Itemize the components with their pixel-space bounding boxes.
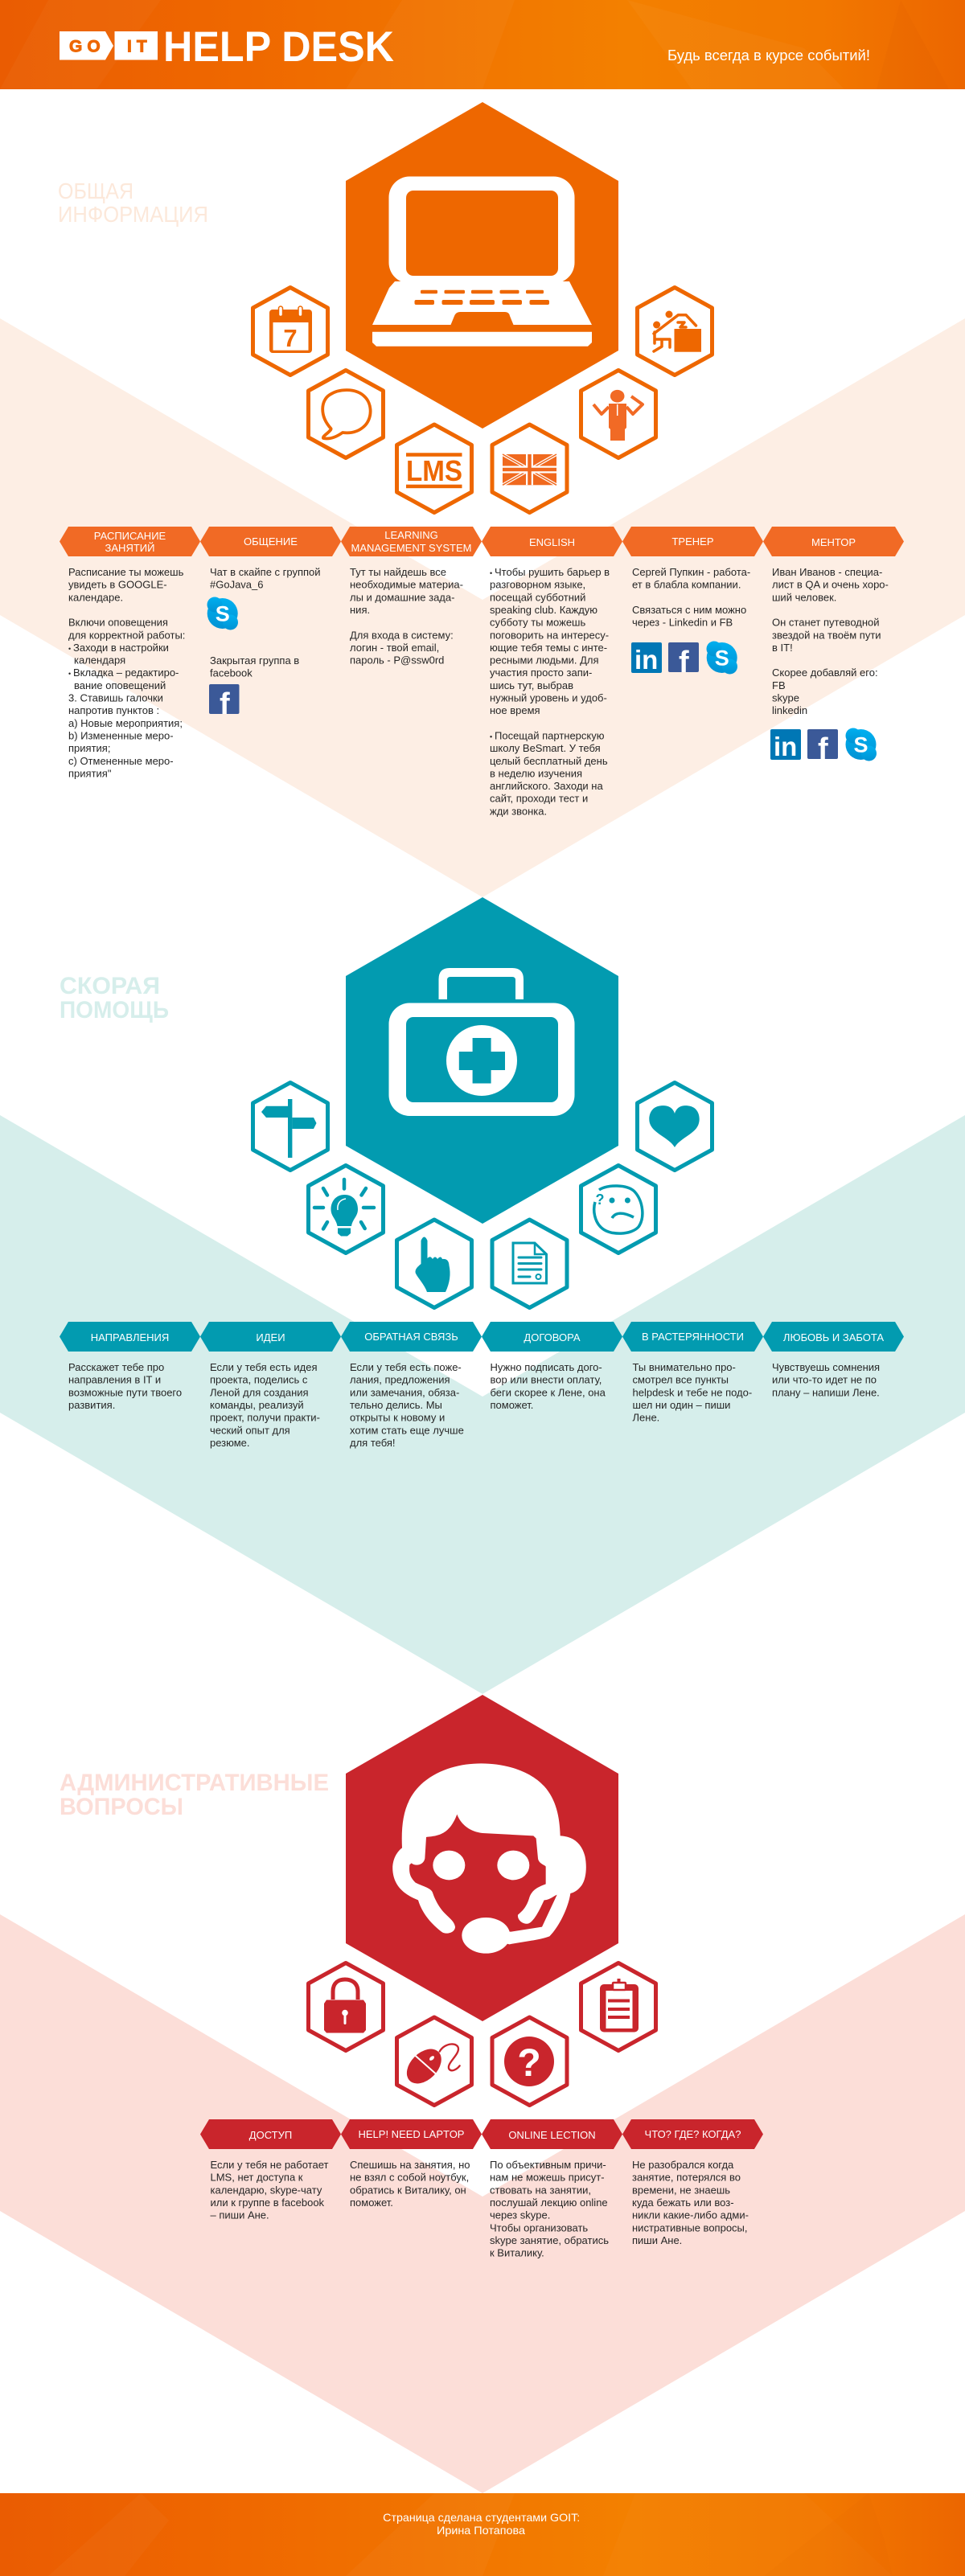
text column: online lection: По объективным причи-: [490, 2159, 606, 2171]
section heading: admin questions: [60, 1770, 329, 1820]
text column: schedule: для корректной работы:: [68, 629, 185, 641]
text column: ideas: проект, получи практи-: [210, 1412, 320, 1424]
text column: schedule: календаре.: [68, 591, 123, 603]
text column: laptop: Спешишь на занятия, но: [350, 2159, 470, 2171]
footer credit: Страница сделана студентами GOIT:: [383, 2511, 580, 2524]
text column: laptop: обратись к Виталику, он: [350, 2184, 466, 2196]
hex icon: LMS: [397, 425, 471, 513]
background chevron: admin questions: [0, 1914, 965, 2493]
text column: English: ющие тебя темы с инте-: [490, 642, 607, 654]
text column: English: Посещай партнерскую: [495, 729, 605, 741]
social icons: mentor: in: [774, 732, 797, 761]
text column: schedule: приятия;: [68, 742, 110, 754]
hex icon: lock: [309, 1963, 383, 2050]
text column: what where when: никли какие-либо адми-: [632, 2209, 749, 2221]
hex icon: question mark: [492, 2017, 567, 2105]
social icons: trainer: [631, 642, 737, 679]
text column: what where when: занятие, потерялся во: [632, 2172, 741, 2184]
text column: mentor: FB: [772, 679, 786, 691]
text column: mentor: Он станет путеводной: [772, 617, 880, 629]
ribbon row: first aid: ДОГОВОРА: [524, 1331, 581, 1343]
text column: LMS: ния.: [350, 604, 370, 616]
text column: English: Чтобы рушить барьер в: [495, 566, 610, 578]
text column: schedule: вание оповещений: [74, 679, 166, 691]
text column: ideas: команды, реализуй: [210, 1399, 304, 1411]
ribbon row: general information: ЗАНЯТИЙ: [105, 542, 154, 554]
text column: communication: facebook: [210, 667, 253, 679]
ribbon row: general information: MANAGEMENT SYSTEM: [351, 542, 472, 554]
ribbon row: first aid: ОБРАТНАЯ СВЯЗЬ: [364, 1331, 458, 1343]
text column: what where when: Не разобрался когда: [632, 2159, 734, 2171]
text column: English: английского. Заходи на: [490, 780, 603, 792]
section heading: admin questions: ВОПРОСЫ: [60, 1794, 183, 1820]
text column: LMS: пароль - P@ssw0rd: [350, 654, 444, 667]
ribbon row: general information: [60, 527, 904, 556]
text column: English: участия просто запи-: [490, 667, 592, 679]
text column: schedule: •: [68, 670, 71, 678]
text column: English: разговорном языке,: [490, 579, 585, 591]
footer banner: [0, 2493, 965, 2576]
logo: GO IT: [60, 31, 158, 59]
text column: access: Если у тебя не работает: [211, 2159, 329, 2171]
text column: online lection: через skype.: [490, 2209, 550, 2221]
text column: schedule: календаря: [74, 654, 125, 667]
icon: support agent with headset: [392, 1763, 586, 1954]
text column: feedback: для тебя!: [350, 1437, 396, 1449]
text column: confused: Лене.: [632, 1412, 659, 1424]
text column: laptop: не взял с собой ноутбук,: [350, 2172, 469, 2184]
text column: English: ное время: [490, 704, 540, 716]
hex icon: pointing hand: [397, 1220, 471, 1307]
ribbon row: first aid: [60, 1322, 904, 1352]
text column: contract: Нужно подписать дого-: [491, 1361, 602, 1373]
text column: English: нужный уровень и удоб-: [490, 691, 607, 704]
social icons: trainer: in: [634, 645, 658, 675]
background chevron: general information: [0, 318, 965, 897]
text column: online lection: нам не можешь присут-: [490, 2172, 605, 2184]
hex icon: trainer: [581, 370, 656, 458]
text column: what where when: нистративные вопросы,: [632, 2221, 748, 2233]
hex icon: calendar: [253, 288, 328, 375]
logo: GO IT: IT: [127, 37, 152, 56]
hex icon: chat bubble: [309, 370, 383, 458]
text column: ideas: Леной для создания: [210, 1386, 309, 1398]
text column: English: •: [490, 569, 492, 577]
text column: mentor: в IT!: [772, 642, 793, 654]
text column: access: – пиши Ане.: [211, 2209, 269, 2221]
section heading: first aid: ПОМОЩЬ: [60, 997, 169, 1023]
icon: laptop: [372, 177, 592, 347]
text column: online lection: к Виталику.: [490, 2247, 544, 2259]
text column: feedback: хотим стать еще лучше: [350, 1424, 464, 1436]
text column: English: ресными людьми. Для: [490, 654, 599, 667]
text column: schedule: увидеть в GOOGLE-: [68, 579, 167, 591]
hex icon: clipboard: [581, 1963, 656, 2050]
text column: directions: возможные пути твоего: [68, 1386, 182, 1398]
ribbon row: general information: ENGLISH: [529, 536, 575, 548]
main hexagon: laptop: [346, 102, 618, 429]
text column: what where when: времени, не знаешь: [632, 2184, 730, 2196]
section heading: general information: [58, 178, 208, 227]
text column: online lection: послушай лекцию online: [490, 2197, 608, 2209]
main hexagon: first aid kit: [346, 897, 618, 1224]
hex icon: confused face: [581, 1166, 656, 1253]
text column: trainer: Сергей Пупкин - работа-: [632, 566, 750, 578]
hex icon: confused face: ?: [595, 1192, 605, 1208]
tagline: Будь всегда в курсе событий!: [667, 47, 870, 64]
ribbon row: general information: ОБЩЕНИЕ: [244, 535, 298, 548]
section heading: first aid: СКОРАЯ: [60, 973, 160, 999]
text column: confused: Ты внимательно про-: [632, 1361, 736, 1373]
logo: GO IT: GO: [69, 37, 105, 56]
hex icon: document: [492, 1220, 567, 1307]
text column: access: LMS, нет доступа к: [211, 2172, 303, 2184]
text column: online lection: ствовать на занятии,: [490, 2184, 591, 2196]
text column: confused: helpdesk и тебе не подо-: [632, 1386, 752, 1398]
ribbon row: first aid: ИДЕИ: [256, 1331, 285, 1343]
ribbon row: first aid: НАПРАВЛЕНИЯ: [91, 1331, 169, 1343]
ribbon row: admin questions: ЧТО? ГДЕ? КОГДА?: [645, 2128, 741, 2140]
text column: LMS: лы и домашние зада-: [350, 591, 454, 603]
text column: English: в неделю изучения: [490, 767, 582, 779]
text column: contract: вор или внести оплату,: [491, 1374, 602, 1386]
text column: online lection: Чтобы организовать: [490, 2221, 588, 2233]
text column: laptop: поможет.: [350, 2197, 393, 2209]
icon: skype: S: [216, 601, 230, 626]
text column: communication: Чат в скайпе с группой: [210, 566, 321, 578]
text column: mentor: лист в QA и очень хоро-: [772, 579, 889, 591]
hex icon: calendar: 7: [283, 324, 298, 352]
text column: directions: Расскажет тебе про: [68, 1361, 164, 1373]
section heading: general information: ОБЩАЯ: [58, 178, 133, 203]
text column: ideas: резюме.: [210, 1437, 250, 1449]
icon: first aid kit: [389, 968, 574, 1116]
ribbon row: general information: МЕНТОР: [811, 536, 856, 548]
hex icon: mentor helping climber: [637, 288, 712, 375]
text column: schedule: Включи оповещения: [68, 617, 168, 629]
hex icon: LMS: LMS: [406, 454, 462, 487]
text column: English: посещай субботний: [490, 591, 585, 603]
text column: mentor: Скорее добавляй его:: [772, 667, 878, 679]
text column: access: или к группе в facebook: [211, 2197, 325, 2209]
background chevron: first aid: [0, 1115, 965, 1694]
text column: mentor: звездой на твоём пути: [772, 629, 881, 641]
text column: mentor: skype: [772, 691, 799, 704]
text column: schedule: Расписание ты можешь: [68, 566, 184, 578]
text column: English: speaking club. Каждую: [490, 604, 597, 616]
hex icon: light bulb: [309, 1166, 383, 1253]
text column: confused: шел ни один – пиши: [632, 1399, 730, 1411]
text column: schedule: c) Отмененные меро-: [68, 755, 174, 767]
text column: love and care: Чувствуешь сомнения: [772, 1361, 880, 1373]
ribbon row: admin questions: HELP! NEED LAPTOP: [359, 2128, 464, 2140]
text column: English: •: [490, 732, 492, 740]
text column: mentor: linkedin: [772, 704, 807, 716]
hex icon: signpost: [253, 1082, 328, 1171]
social icons: mentor: [770, 728, 877, 766]
ribbon row: first aid: В РАСТЕРЯННОСТИ: [642, 1331, 744, 1343]
text column: feedback: тельно делись. Мы: [350, 1399, 442, 1411]
social icons: trainer: f: [679, 646, 689, 679]
social icons: mentor: f: [818, 732, 828, 766]
text column: schedule: a) Новые мероприятия;: [68, 717, 183, 729]
footer credit: Ирина Потапова: [437, 2524, 525, 2537]
text column: what where when: пиши Ане.: [632, 2234, 682, 2246]
ribbon row: admin questions: ONLINE LECTION: [508, 2129, 596, 2141]
text column: ideas: Если у тебя есть идея: [210, 1361, 317, 1373]
text column: love and care: или что-то идет не по: [772, 1374, 877, 1386]
text column: English: школу BeSmart. У тебя: [490, 742, 601, 754]
text column: feedback: лания, предложения: [350, 1374, 450, 1386]
main hexagon: support agent: [346, 1695, 618, 2021]
text column: what where when: куда бежать или воз-: [632, 2197, 734, 2209]
ribbon row: general information: РАСПИСАНИЕ: [94, 530, 166, 542]
social icons: mentor: S: [853, 733, 868, 757]
ribbon row: admin questions: [200, 2119, 763, 2149]
text column: ideas: проекта, поделись с: [210, 1374, 308, 1386]
icon: facebook: f: [220, 687, 230, 721]
text column: love and care: плану – напиши Лене.: [772, 1386, 880, 1398]
text column: trainer: ет в блабла компании.: [632, 579, 741, 591]
text column: LMS: логин - твой email,: [350, 642, 439, 654]
text column: feedback: открыты к новому и: [350, 1412, 445, 1424]
text column: English: жди звонка.: [490, 805, 547, 817]
text column: contract: поможет.: [491, 1399, 533, 1411]
text column: schedule: b) Измененные меро-: [68, 729, 174, 741]
text column: feedback: Если у тебя есть поже-: [350, 1361, 462, 1373]
ribbon row: general information: LEARNING: [384, 529, 438, 541]
hex icon: computer mouse: [397, 2017, 471, 2105]
text column: trainer: через - Linkedin и FB: [632, 617, 733, 629]
ribbon row: admin questions: ДОСТУП: [249, 2129, 292, 2141]
social icons: trainer: S: [715, 646, 729, 671]
text column: schedule: напротив пунктов :: [68, 704, 159, 716]
text column: contract: беги скорее к Лене, она: [491, 1386, 606, 1398]
section heading: first aid: [60, 973, 169, 1023]
hex icon: question mark: ?: [517, 2042, 541, 2085]
text column: LMS: необходимые материа-: [350, 579, 463, 591]
ribbon row: general information: ТРЕНЕР: [671, 535, 714, 548]
text column: feedback: или замечания, обяза-: [350, 1386, 459, 1398]
text column: schedule: Вкладка – редактиро-: [73, 667, 179, 679]
title: HELP DESK: HELP DESK: [163, 23, 394, 71]
text column: English: шись тут, выбрав: [490, 679, 573, 691]
text column: mentor: Иван Иванов - специа-: [772, 566, 882, 578]
text column: schedule: Заходи в настройки: [73, 642, 169, 654]
hex icon: British flag: [492, 425, 567, 513]
text column: schedule: 3. Ставишь галочки: [68, 691, 163, 704]
text column: English: поговорить на интересу-: [490, 629, 609, 641]
text column: communication: #GoJava_6: [210, 579, 264, 591]
header banner: [0, 0, 965, 89]
text column: LMS: Тут ты найдешь все: [350, 566, 446, 578]
section heading: general information: ИНФОРМАЦИЯ: [58, 202, 208, 227]
text column: ideas: ческий опыт для: [210, 1424, 290, 1436]
text column: schedule: приятия": [68, 767, 112, 779]
text column: schedule: •: [68, 645, 71, 653]
icon: facebook: [209, 684, 240, 721]
text column: mentor: ший человек.: [772, 591, 836, 603]
ribbon row: first aid: ЛЮБОВЬ И ЗАБОТА: [783, 1331, 884, 1343]
text column: directions: развития.: [68, 1399, 115, 1411]
section heading: admin questions: АДМИНИСТРАТИВНЫЕ: [60, 1770, 329, 1796]
text column: English: целый бесплатный день: [490, 755, 608, 767]
hex icon: heart: [637, 1082, 712, 1171]
text column: access: календарю, skype-чату: [211, 2184, 322, 2196]
text column: directions: направления в IT и: [68, 1374, 161, 1386]
text column: English: сайт, проходи тест и: [490, 793, 588, 805]
footer credit: [383, 2511, 580, 2537]
icon: skype: [207, 597, 238, 630]
text column: English: субботу ты можешь: [490, 617, 585, 629]
text column: trainer: Связаться с ним можно: [632, 604, 746, 616]
text column: confused: смотрел все пункты: [632, 1374, 729, 1386]
text column: online lection: skype занятие, обратись: [490, 2234, 609, 2246]
text column: communication: Закрытая группа в: [210, 654, 299, 667]
text column: LMS: Для входа в систему:: [350, 629, 454, 641]
